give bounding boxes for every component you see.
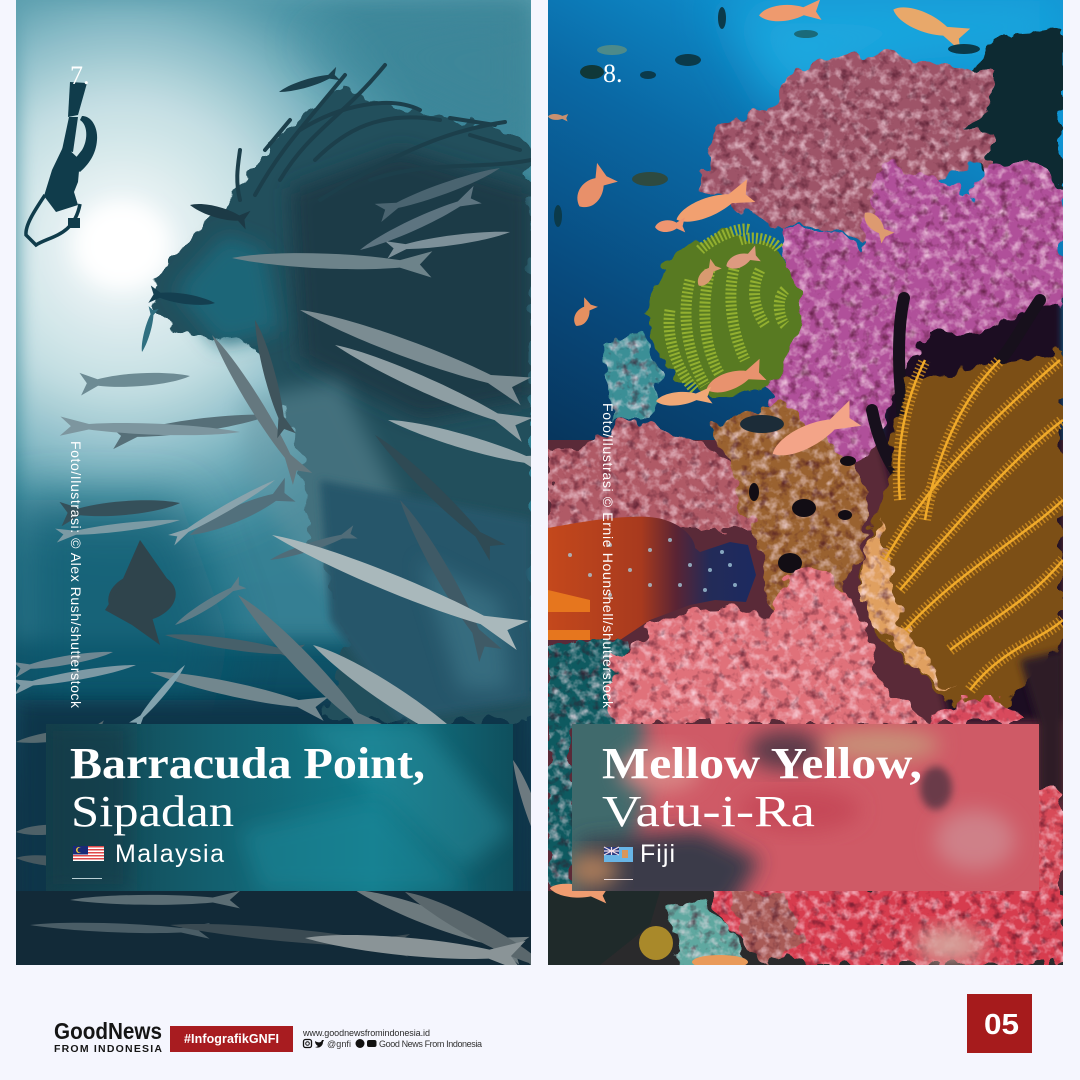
panel 7 caption box (46, 724, 513, 891)
green crinoid (649, 229, 801, 397)
brown coral with black damsel fish (710, 400, 870, 623)
page number badge (967, 994, 1032, 1053)
anthias fish (548, 0, 970, 465)
dark teal lower-left reef (548, 640, 625, 890)
number 7: 7. (70, 61, 90, 90)
photo credit right: Foto/Ilustrasi © Ernie Hounshell/shutterstock (600, 403, 616, 709)
footer logo (54, 1018, 162, 1055)
flag: Fiji (604, 847, 633, 862)
salmon soft coral (610, 570, 1063, 800)
footer logo: FROM INDONESIA (54, 1043, 162, 1055)
panel: Barracuda Point photo (12, 0, 564, 985)
reef base (548, 440, 1063, 891)
country: Fiji (640, 840, 675, 868)
social page name: Good News From Indonesia (379, 1039, 482, 1049)
barracuda school mass (150, 85, 531, 720)
heading: Barracuda Point, (70, 739, 425, 788)
purple soft coral (765, 158, 1063, 464)
social handle: @gnfi (327, 1039, 351, 1049)
lower school (16, 891, 531, 965)
subheading: Sipadan (71, 787, 234, 836)
hashtag badge: #InfografikGNFI (184, 1032, 279, 1046)
pink-white coral left (548, 420, 760, 535)
barracuda fish (12, 67, 564, 876)
page number badge: 05 (984, 1009, 1019, 1041)
panel 8 caption box (572, 724, 1039, 891)
teal coral (606, 330, 660, 420)
subheading: Vatu-i-Ra (602, 787, 815, 836)
small dark fish (554, 7, 980, 433)
heading: Mellow Yellow, (602, 739, 922, 788)
school fish, dark upper strokes (237, 65, 531, 200)
website: www.goodnewsfromindonesia.id (302, 1028, 430, 1038)
number 8: 8. (603, 59, 622, 88)
orange crinoid (856, 350, 1063, 710)
dark crinoid top right (960, 28, 1063, 200)
country: Malaysia (115, 840, 224, 868)
panel: Mellow Yellow photo (548, 0, 1063, 969)
lower reef (548, 790, 1063, 969)
footer logo: GoodNews (54, 1018, 162, 1044)
coral grouper (548, 517, 756, 640)
photo credit left: Foto/Ilustrasi: © Alex Rush/shutterstock (68, 441, 84, 709)
dark shadow behind crinoids (880, 280, 1063, 720)
mauve coral (700, 50, 992, 245)
diver (26, 82, 97, 245)
divider line right (604, 879, 633, 880)
hashtag badge (170, 1026, 293, 1052)
divider line left (72, 878, 102, 879)
social icons (304, 1039, 376, 1048)
black crinoid arms (872, 298, 1040, 470)
flag: Malaysia (73, 846, 104, 861)
